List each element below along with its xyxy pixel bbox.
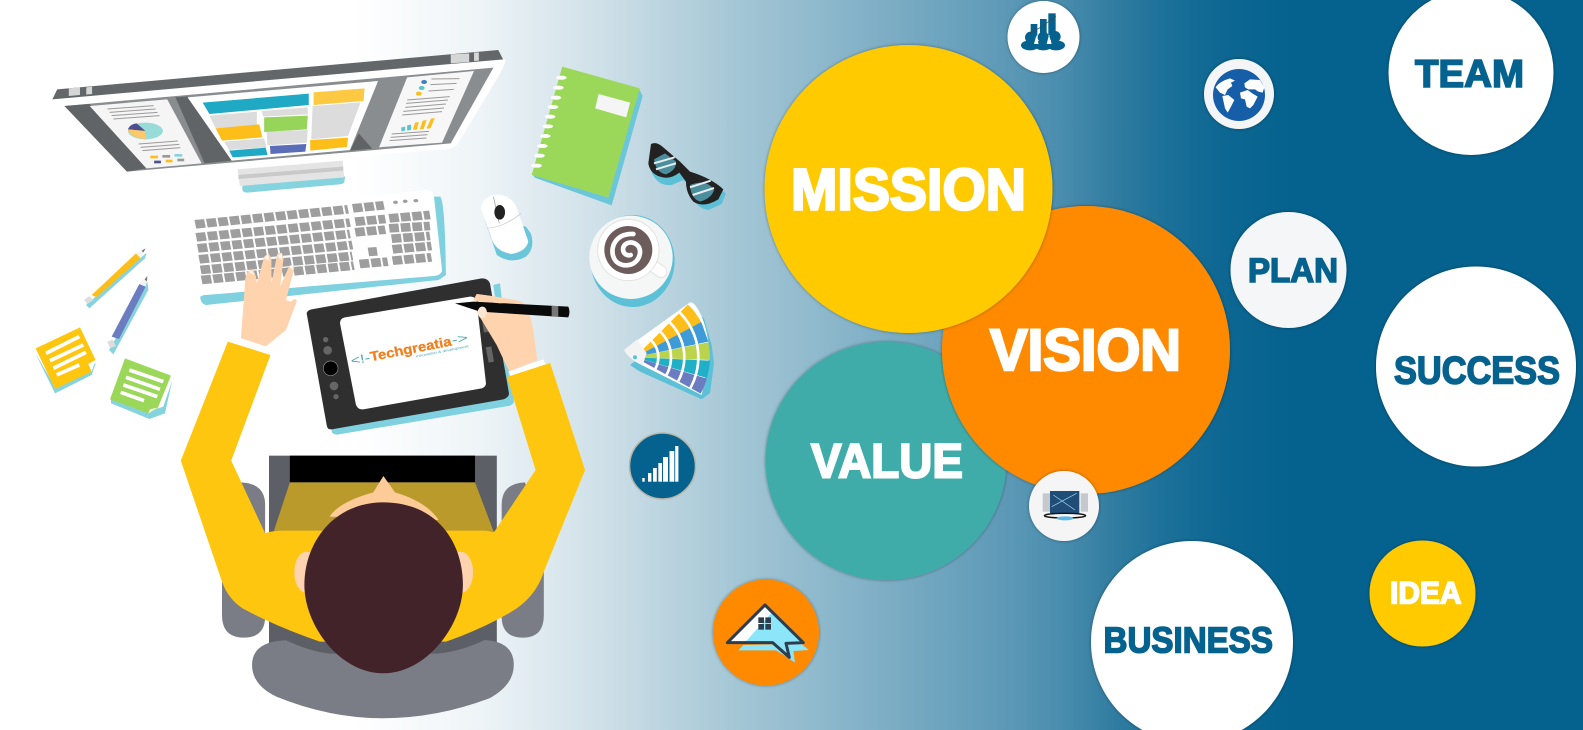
blue pencil bbox=[107, 276, 148, 354]
house speech bubble bbox=[727, 604, 809, 663]
circle: vision bbox=[942, 206, 1230, 494]
label: mission: MISSION bbox=[791, 158, 1026, 222]
nose and forehead bbox=[330, 476, 439, 520]
stats icon bbox=[630, 433, 696, 499]
yellow pencil bbox=[84, 248, 147, 308]
coffee cup bbox=[589, 215, 675, 307]
ears bbox=[294, 552, 473, 593]
hair bbox=[304, 502, 463, 673]
label: business: BUSINESS bbox=[1104, 620, 1273, 660]
green notebook bbox=[531, 67, 643, 205]
monitor screen content bbox=[108, 79, 459, 163]
yellow sweater bbox=[181, 342, 585, 642]
circle: plan bbox=[1230, 212, 1346, 328]
colour swatch fan bbox=[624, 302, 714, 400]
circle: business bbox=[1091, 541, 1293, 730]
mouse bbox=[481, 195, 532, 260]
label: plan: PLAN bbox=[1248, 252, 1338, 290]
logo text: Techgreatia bbox=[369, 334, 453, 364]
label: team: TEAM bbox=[1415, 53, 1524, 96]
chart and people glyph bbox=[1021, 13, 1065, 50]
left hand bbox=[238, 253, 297, 349]
logo text bbox=[349, 330, 470, 371]
label: success: SUCCESS bbox=[1394, 350, 1560, 392]
icon: screen hologram bbox=[1029, 471, 1099, 541]
illustration: desk workspace bbox=[35, 50, 726, 718]
monitor bbox=[52, 50, 506, 193]
label: value: VALUE bbox=[811, 436, 963, 488]
signal bars bbox=[642, 446, 678, 482]
pencils and sticky notes bbox=[35, 248, 172, 419]
circle: house icon bbox=[713, 580, 819, 686]
seat cushion bbox=[252, 640, 514, 718]
continents bbox=[1216, 78, 1264, 113]
icon: globe bbox=[1204, 59, 1274, 129]
circle: success bbox=[1376, 266, 1576, 466]
circle: value bbox=[766, 342, 1006, 580]
chair and person bbox=[181, 342, 585, 718]
screen glyph bbox=[1043, 491, 1088, 520]
keyboard keys bbox=[195, 205, 431, 280]
yellow note bbox=[35, 327, 96, 393]
circle: idea bbox=[1370, 540, 1476, 646]
icon: chess team chart bbox=[1008, 1, 1080, 73]
logo text: innovation & development bbox=[416, 344, 469, 358]
tablet with logo bbox=[307, 278, 569, 435]
keyboard bbox=[190, 190, 446, 305]
logo text: <!- bbox=[350, 351, 371, 368]
circle: team bbox=[1388, 0, 1554, 155]
logo text: -> bbox=[450, 330, 469, 347]
monitor stand bbox=[242, 177, 345, 193]
label: idea: IDEA bbox=[1390, 574, 1462, 610]
right hand with stylus bbox=[455, 294, 569, 377]
circle: mission bbox=[764, 45, 1052, 333]
green note bbox=[110, 358, 172, 419]
chair bbox=[222, 456, 544, 659]
label: vision: VISION bbox=[990, 318, 1181, 383]
glasses bbox=[648, 143, 726, 210]
